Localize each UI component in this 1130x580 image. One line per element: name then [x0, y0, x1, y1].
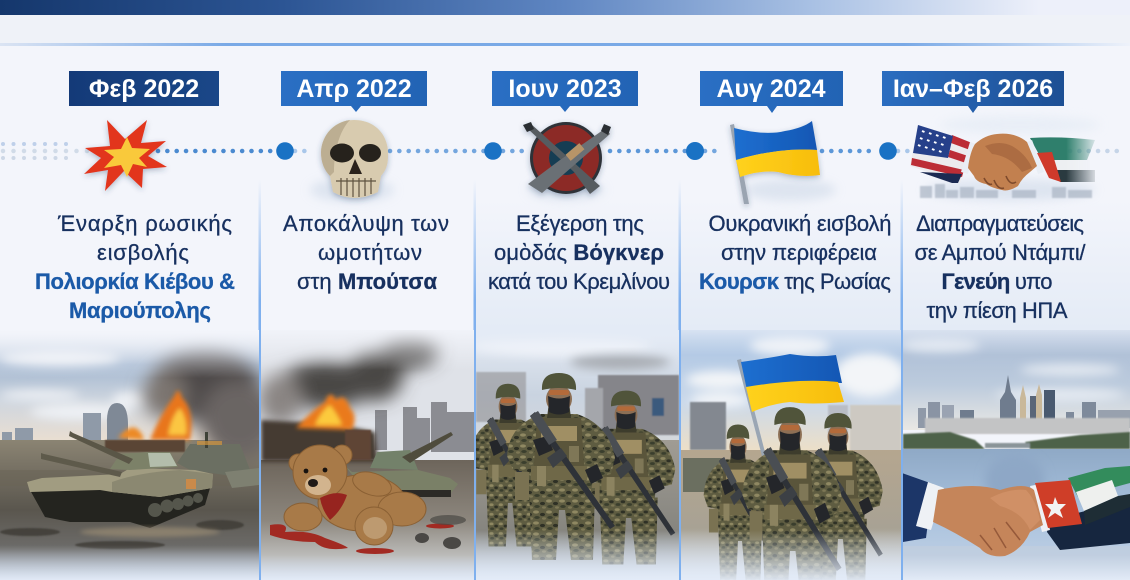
- far shore trees: [903, 432, 1130, 449]
- panel: three soldiers in ruined city: [470, 330, 679, 580]
- pale panel tint behind text: [476, 200, 1130, 330]
- text: Εξέγερση της ομάδας Βάγκνερ: κατά του Κρεμλίνου: [488, 269, 670, 294]
- fire: [296, 394, 355, 430]
- soldier left: [704, 424, 763, 580]
- text: Διαπραγματεύσεις: την πίεση ΗΠΑ: [926, 298, 1068, 323]
- date tag: Αυγ 2024: [700, 71, 843, 113]
- text: Εξέγερση της ομάδας Βάγκνερ: [488, 211, 670, 294]
- skyline behind handshake: [920, 184, 1092, 198]
- header rule: [0, 15, 1130, 46]
- cuffs: [961, 142, 976, 174]
- text: Αποκάλυψη των ωμοτήτων: [283, 211, 449, 294]
- date tag: Αυγ 2024: Αυγ 2024: [716, 75, 826, 103]
- date tag: Ιουν 2023: Ιουν 2023: [508, 75, 622, 103]
- buildings: [689, 401, 901, 450]
- text: Ουκρανική εισβολή: [699, 211, 892, 294]
- ruined buildings: [261, 420, 378, 462]
- tank behind bear: [345, 432, 458, 497]
- text: Έναρξη ρωσικής εισβολής: [35, 211, 235, 323]
- icon: Ukrainian flag: [730, 121, 820, 204]
- left sleeve: [902, 473, 933, 542]
- icon: crossed rifles emblem: [523, 122, 611, 194]
- raised flag: [737, 354, 844, 460]
- city skyline: [2, 403, 128, 440]
- text: Έναρξη ρωσικής εισβολής: Πολιορκία Κιέβου &: [35, 269, 235, 294]
- blood: [270, 524, 454, 554]
- date tag: Ιαν–Φεβ 2026: Ιαν–Φεβ 2026: [893, 75, 1053, 103]
- text: Διαπραγματεύσεις: Γενεύη υπο: [942, 269, 1052, 294]
- panel: teddy bear and ruins: [258, 330, 474, 580]
- skyline: [375, 402, 474, 452]
- soldier left: [476, 384, 532, 546]
- red flag band: [1035, 480, 1082, 528]
- smoke plume: [258, 332, 438, 426]
- panel: soldiers with raised flag: [681, 330, 905, 580]
- text: Εξέγερση της ομάδας Βάγκνερ: ομὸδάς Βόγκνερ: [494, 240, 664, 265]
- text: Ουκρανική εισβολή: Ουκρανική εισβολή: [708, 211, 892, 236]
- soldier center: [742, 407, 842, 580]
- text: Έναρξη ρωσικής εισβολής: Έναρξη ρωσικής: [57, 211, 232, 236]
- top and bottom fades: [0, 330, 259, 378]
- smoke: [143, 347, 280, 460]
- text: Ουκρανική εισβολή: Κουρσκ της Ρωσίας: [699, 269, 891, 294]
- text: Διαπραγματεύσεις: Διαπραγματεύσεις: [916, 211, 1084, 236]
- icon: skull: [321, 120, 388, 198]
- date tag: Ιουν 2023: [492, 71, 638, 112]
- hands: [933, 486, 1043, 556]
- clouds: [686, 335, 905, 407]
- rear tank: [177, 432, 259, 488]
- timeline dotted line: [3, 144, 1126, 158]
- text: Διαπραγματεύσεις: [914, 211, 1086, 323]
- ruined buildings: [476, 372, 679, 435]
- timeline nodes: [276, 142, 897, 160]
- US flag sleeve: [910, 125, 972, 183]
- icon: explosion: [84, 120, 167, 191]
- icon: handshake with US and UAE sleeves: [910, 125, 1095, 198]
- right cuff: [1030, 484, 1050, 532]
- text: Αποκάλυψη των ωμοτήτων: στη Μπούτσα: [297, 269, 437, 294]
- soldier right: [814, 413, 883, 580]
- watercolor wash beneath icons: [310, 116, 1100, 202]
- date tag: Φεβ 2022: [69, 71, 219, 106]
- right sleeve with UAE flag colors: [1047, 507, 1130, 550]
- panel: city skyline, lake and handshake: [900, 330, 1130, 580]
- text: Αποκάλυψη των ωμοτήτων: ωμοτήτων: [318, 240, 422, 265]
- far shore reflection: [903, 546, 1130, 580]
- date tag: Ιαν–Φεβ 2026: [882, 71, 1064, 113]
- text: Ουκρανική εισβολή: στην περιφέρεια: [721, 240, 877, 265]
- text: Έναρξη ρωσικής εισβολής: Μαριούπολης: [69, 298, 211, 323]
- wrecked vehicle: [683, 458, 721, 492]
- header banner: [0, 0, 1130, 15]
- text: Έναρξη ρωσικής εισβολής: εισβολής: [97, 240, 189, 265]
- date tag: Απρ 2022: Απρ 2022: [296, 75, 412, 103]
- panel dividers: [258, 180, 903, 580]
- soldier center: [507, 373, 615, 560]
- text: Διαπραγματεύσεις: σε Αμπού Ντάμπι/: [914, 240, 1086, 265]
- teddy bear: [284, 445, 426, 545]
- right sleeve: [1030, 137, 1095, 182]
- skyline: [918, 375, 1130, 434]
- main tank: [27, 431, 213, 528]
- date tag: Απρ 2022: [281, 71, 427, 112]
- fire: [118, 391, 191, 440]
- text: Αποκάλυψη των ωμοτήτων: Αποκάλυψη των: [283, 211, 449, 236]
- panel: tanks and burning city: [0, 330, 280, 580]
- clasped hands: [968, 134, 1037, 190]
- lake: [903, 449, 1130, 580]
- rubble: [0, 520, 244, 549]
- date tag: Φεβ 2022: Φεβ 2022: [89, 75, 199, 103]
- soldier right: [592, 390, 676, 564]
- text: Εξέγερση της ομάδας Βάγκνερ: Εξέγερση της: [516, 211, 644, 236]
